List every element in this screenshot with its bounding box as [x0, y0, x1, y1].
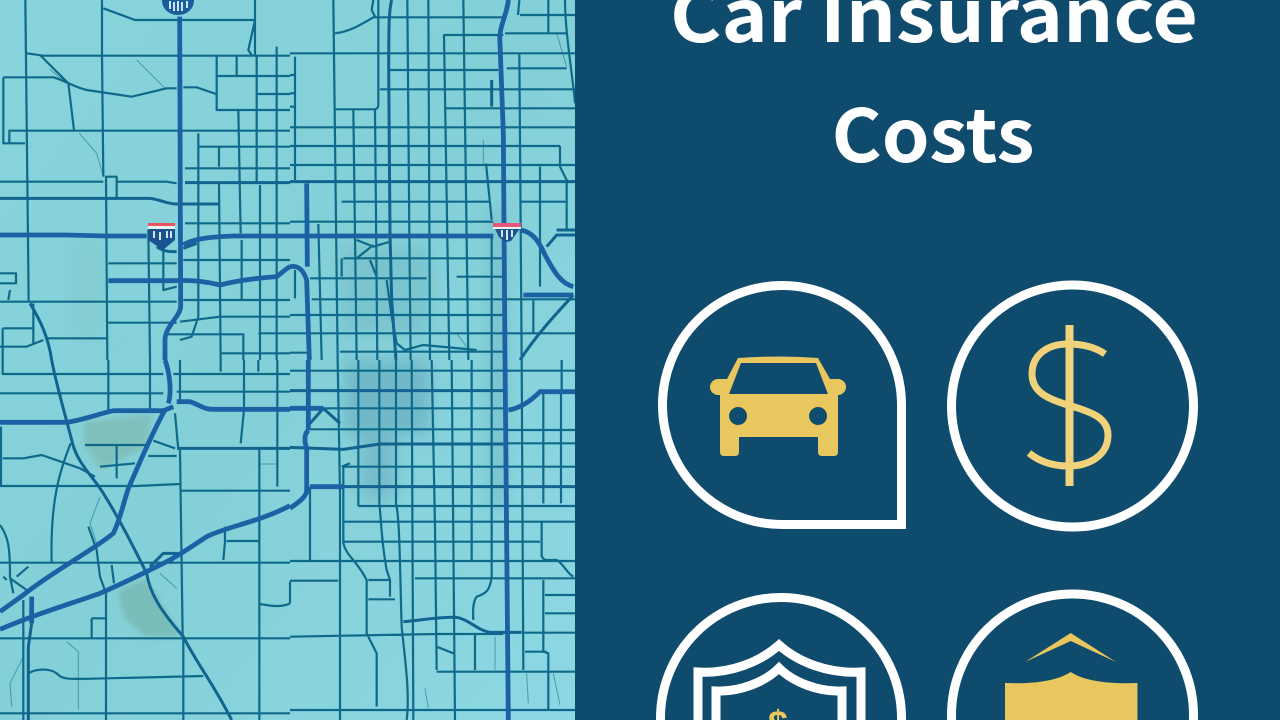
icon: gold shield badge: [952, 594, 1194, 720]
icon: shield with dollar badge: [660, 598, 902, 720]
roads: top-left tile: [0, 0, 290, 360]
roads: top-right tile: [290, 0, 575, 360]
roads: bottom-left tile: [0, 360, 290, 720]
title: Costs: [832, 78, 1034, 184]
icon: car in pin badge: [663, 285, 902, 524]
gold shield: [1005, 672, 1138, 720]
icon: interstate marker top: [162, 0, 194, 15]
title: [670, 0, 1198, 184]
inner shield: [716, 668, 842, 720]
outer shield: [698, 645, 861, 720]
icon: dollar badge: [952, 285, 1194, 527]
icon: interstate shield right: [493, 223, 521, 242]
car: [710, 356, 846, 456]
panel: right column background: [575, 0, 1280, 720]
roads: bottom-right tile: [290, 360, 575, 720]
dollar sign: [1029, 325, 1108, 486]
icon: interstate shield left: [148, 223, 175, 250]
panel: street map: [0, 0, 575, 720]
chevron: [1025, 633, 1116, 662]
